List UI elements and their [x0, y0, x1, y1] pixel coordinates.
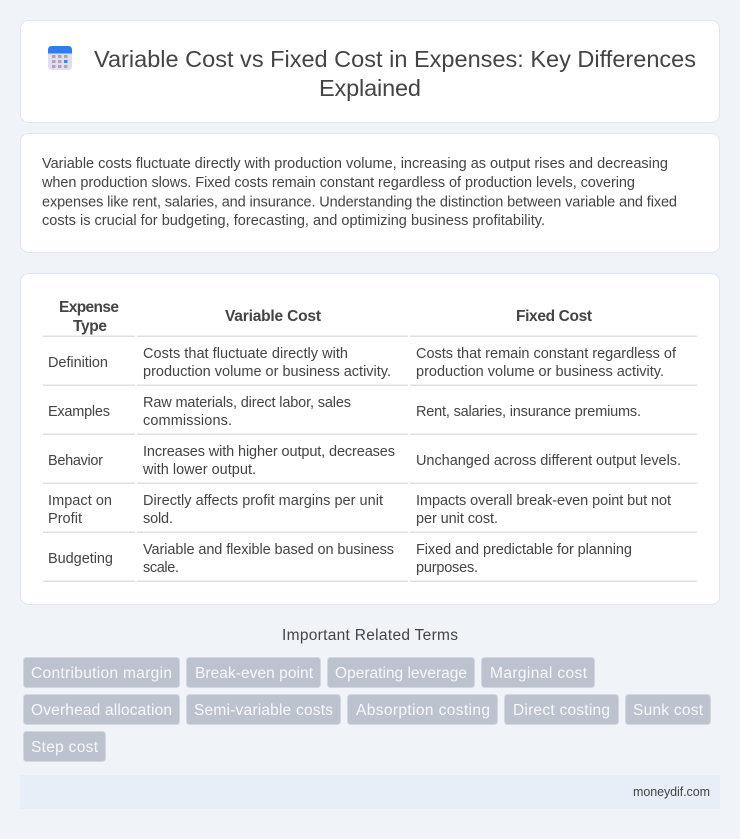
table row: examples: Rent, salaries, insurance premiums.: [416, 404, 641, 420]
table row: definition: Costs that remain constant regardless of: [416, 346, 677, 362]
panel: related term tags: Marginal cost: [490, 665, 588, 682]
table header row: Variable Cost: [225, 308, 321, 325]
table row: budgeting: purposes.: [416, 560, 478, 576]
table row: behavior: Behavior: [48, 453, 103, 469]
panel: comparison table: [20, 274, 720, 604]
table row: behavior: [48, 444, 681, 478]
table row: definition: Costs that fluctuate directly with: [143, 346, 348, 362]
text block: introduction paragraph: when production slows. Fixed costs remain constant regardless of production levels, covering: [41, 175, 635, 191]
panel: introduction: [20, 134, 720, 252]
table row: definition: Definition: [48, 355, 108, 371]
table row: impact on profit: Impact on: [48, 493, 112, 509]
panel: related term tags: Sunk cost: [633, 702, 704, 719]
text block: introduction paragraph: [41, 156, 677, 229]
table row: examples: commissions.: [143, 413, 232, 429]
table row: definition: production volume or business activity.: [416, 364, 664, 380]
panel: related term tags: Direct costing: [513, 702, 610, 719]
table row: impact on profit: Directly affects profit margins per unit: [143, 493, 383, 509]
table row: behavior: Increases with higher output, decreases: [143, 444, 395, 460]
panel: related term tags: Break-even point: [195, 665, 314, 682]
panel: related term tags: Step cost: [31, 739, 99, 756]
panel: related term tags: Overhead allocation: [31, 702, 172, 719]
heading: important related terms: Important Related Terms: [282, 627, 458, 644]
panel: related term tags: Absorption costing: [356, 702, 490, 719]
footer bar: [20, 775, 720, 809]
table row: behavior: with lower output.: [142, 462, 256, 478]
table row: examples: [48, 395, 641, 429]
table header row: Type: [73, 318, 107, 335]
footer bar: moneydif.com: [633, 785, 710, 799]
panel: title header: [20, 20, 720, 122]
table header row: Expense: [59, 299, 119, 316]
table row: examples: Raw materials, direct labor, sales: [143, 395, 351, 411]
table row: budgeting: [48, 542, 632, 576]
text block: introduction paragraph: expenses like rent, salaries, and insurance. Understanding the distinction between variable and fixed: [42, 194, 677, 210]
table row: examples: Examples: [48, 404, 110, 420]
table row: impact on profit: Profit: [48, 511, 82, 527]
panel: related term tags: Semi-variable costs: [194, 702, 333, 719]
table row: impact on profit: Impacts overall break-even point but not: [416, 493, 671, 509]
table row: budgeting: Fixed and predictable for planning: [416, 542, 632, 558]
title: [94, 46, 696, 101]
table row: definition: production volume or business activity.: [143, 364, 391, 380]
table row: impact on profit: [48, 493, 671, 527]
panel: related term tags: Operating leverage: [335, 665, 467, 682]
table row: impact on profit: sold.: [143, 511, 173, 527]
table header row: Fixed Cost: [516, 308, 592, 325]
table header row: [59, 299, 592, 335]
table row: behavior: Unchanged across different output levels.: [416, 453, 681, 469]
table row: budgeting: Variable and flexible based on business: [143, 542, 394, 558]
panel: related term tags: Contribution margin: [31, 665, 172, 682]
title: Explained: [319, 75, 421, 101]
table row: definition: [48, 346, 677, 380]
table row: budgeting: scale.: [143, 560, 179, 576]
title: Variable Cost vs Fixed Cost in Expenses: Key Differences: [94, 46, 696, 72]
text block: introduction paragraph: Variable costs fluctuate directly with production volume, increasing as output rises and decreasing: [42, 156, 668, 172]
text block: introduction paragraph: costs is crucial for budgeting, forecasting, and optimizing business profitability.: [42, 213, 545, 229]
table row: impact on profit: per unit cost.: [416, 511, 498, 527]
icon: calendar: [48, 46, 72, 70]
panel: related term tags: [24, 658, 710, 762]
table row: budgeting: Budgeting: [48, 551, 113, 567]
